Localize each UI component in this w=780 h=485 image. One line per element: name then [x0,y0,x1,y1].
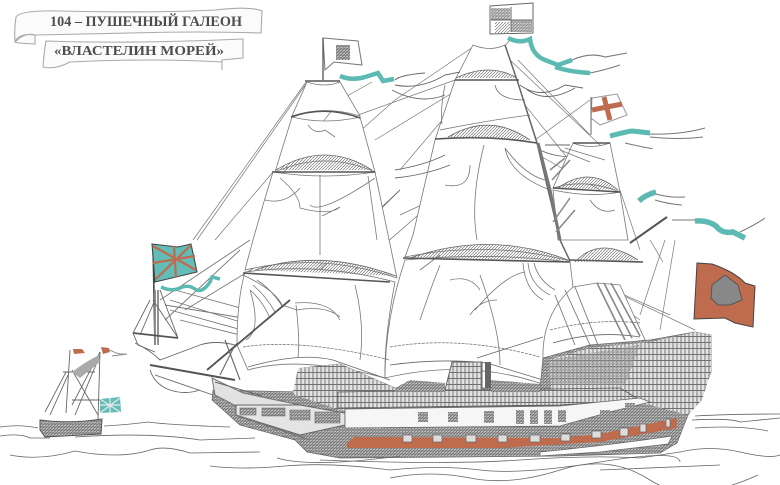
white wale bands [345,398,650,428]
billowing sail folds [265,125,377,255]
mizzen mast ladder [597,283,640,340]
bow planking rows [236,405,345,435]
banner ribbon line one [15,8,262,44]
bowsprit and spritsail [133,245,290,395]
foremast sails [245,81,397,278]
main pleats [440,85,550,240]
rigging lines [160,40,695,350]
right lateen sail [543,283,645,380]
title banner [15,8,262,70]
beak deck [212,378,300,415]
fore course sail [245,172,397,278]
pennant teal small [639,192,656,201]
boat teal flag [100,397,121,413]
pennant teal right [695,221,745,238]
flag: cross of St George [591,94,627,135]
title line two: «ВЛАСТЕЛИН МОРЕЙ» [54,43,224,58]
hull silhouette [212,332,711,458]
sea waves [0,414,780,485]
centre lower course sail [385,256,573,385]
boat hull [40,419,102,437]
pennant mizzen teal [610,131,650,136]
lateen yard [630,217,667,243]
pennant bow teal [161,277,220,290]
fore topsail [275,117,375,172]
small boat [40,347,127,437]
ragged gaskets upper [392,72,590,178]
big lower yards [243,258,643,282]
pennant fore teal [340,73,394,81]
boat sails and rigging [45,350,100,420]
stern shading [548,345,640,385]
flag: union jack bow [152,244,197,282]
flag: red stern ensign [694,263,755,327]
main right edge thick [505,45,570,261]
deck guns upper [418,403,635,424]
banner ribbon line two [43,39,243,70]
fore yards [272,81,375,172]
lower main sails [237,244,645,385]
deck grating [445,362,482,390]
waist gallery rail [338,388,640,408]
pennant main teal [508,38,590,73]
flag: royal standard [490,3,533,34]
main yards [435,80,537,143]
gun ports on strake [403,419,670,442]
flag: fore crest [323,38,362,80]
boat red flags [73,347,110,354]
dashed sail arcs [243,322,640,360]
flags [152,3,755,327]
fore topgallant sail [292,82,360,116]
main mast sails [392,45,590,261]
folds lower sails [243,255,555,365]
title line one: 104 – ПУШЕЧНЫЙ ГАЛЕОН [50,13,243,30]
pennants [161,38,765,290]
main topgallant sail [405,45,570,261]
red strake [347,418,677,448]
left lower course sail [237,269,395,378]
forecastle lattice [293,364,395,410]
hull [212,332,711,458]
mizzen sails [538,143,667,243]
ensign grey emblem [711,275,742,305]
crew on deck [395,380,540,392]
stern castle lattice [548,332,711,415]
mizzen top sails [553,143,620,192]
